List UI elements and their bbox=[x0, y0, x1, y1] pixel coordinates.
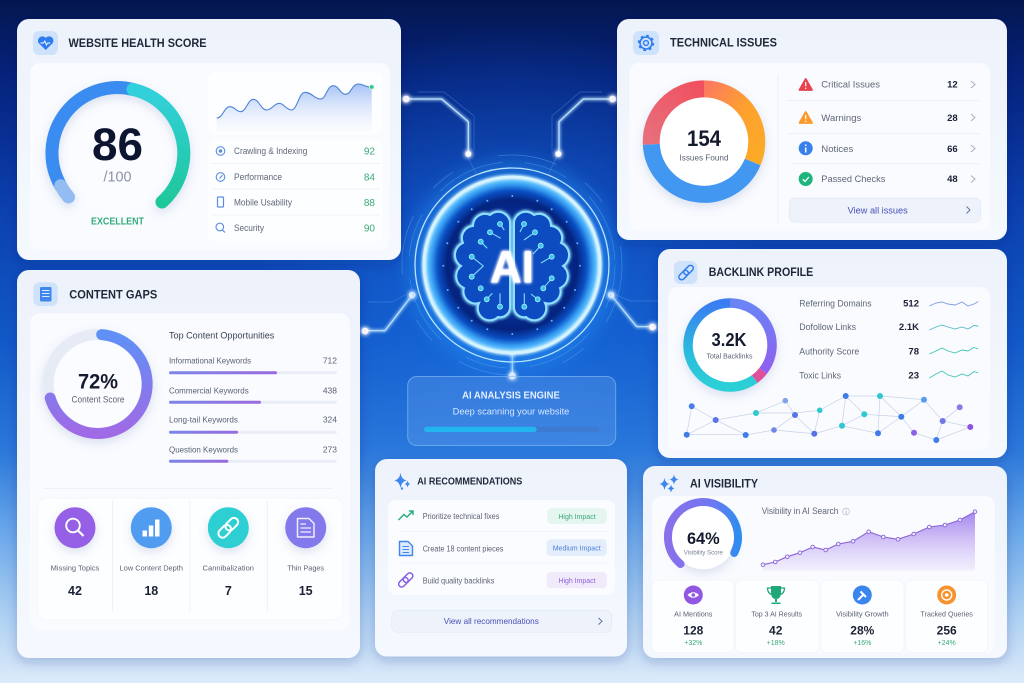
health metrics list: 90 bbox=[364, 224, 375, 234]
view all issues button bbox=[789, 198, 981, 222]
recommendation rows: High Impact bbox=[558, 576, 596, 585]
visibility stat cards: 128 bbox=[683, 624, 704, 638]
recommendation rows bbox=[397, 508, 608, 588]
content opportunities list: 712 bbox=[323, 355, 337, 365]
icon: sparkles bbox=[660, 474, 678, 492]
health metrics list bbox=[208, 140, 382, 241]
visibility stat cards: Visibility Growth bbox=[836, 610, 889, 619]
connector lines bbox=[362, 92, 660, 379]
panel: technical issues bbox=[617, 19, 1007, 240]
panel: AI analysis engine bbox=[408, 376, 616, 446]
content gap stat cards bbox=[38, 488, 343, 620]
content score donut: Content Score bbox=[72, 395, 124, 405]
icon: document bbox=[33, 282, 58, 306]
visibility stat cards: +16% bbox=[853, 640, 871, 647]
issues list: 28 bbox=[947, 113, 958, 124]
health gauge: /100 bbox=[104, 170, 132, 186]
view all recommendations button bbox=[392, 610, 612, 632]
visibility stat cards: 256 bbox=[937, 624, 957, 638]
panel: website health score bbox=[17, 19, 401, 260]
content gap stat cards: 18 bbox=[144, 584, 158, 598]
issues list: 48 bbox=[947, 174, 958, 185]
content score donut bbox=[43, 329, 153, 439]
visibility stat cards: Tracked Queries bbox=[921, 610, 973, 619]
backlink metrics: Toxic Links bbox=[799, 370, 841, 380]
visibility line chart: Visibility in AI Search bbox=[762, 506, 838, 516]
heading: BACKLINK PROFILE bbox=[709, 267, 814, 279]
issues list: Notices bbox=[821, 144, 854, 154]
issues donut bbox=[643, 81, 765, 203]
health metrics list: 92 bbox=[364, 146, 375, 158]
icon: heart bbox=[33, 31, 58, 55]
link network graph bbox=[684, 393, 973, 443]
heading: TECHNICAL ISSUES bbox=[670, 38, 777, 50]
recommendation rows: Prioritize technical fixes bbox=[423, 512, 499, 521]
backlink metrics: 512 bbox=[903, 299, 919, 310]
backlink metrics: 23 bbox=[908, 370, 919, 381]
icon: sparkles bbox=[394, 473, 410, 490]
health metrics list: 88 bbox=[364, 198, 375, 209]
issues list: 12 bbox=[947, 80, 958, 91]
visibility donut bbox=[668, 502, 738, 569]
issues list: Passed Checks bbox=[821, 174, 886, 184]
backlinks donut: 3.2K bbox=[712, 330, 746, 350]
content opportunities list bbox=[169, 330, 337, 463]
recommendation rows: Build quality backlinks bbox=[423, 576, 494, 586]
issues list: Critical Issues bbox=[821, 80, 881, 90]
visibility stat cards: 28% bbox=[850, 624, 875, 638]
content score donut: 72% bbox=[78, 370, 118, 393]
visibility donut: 64% bbox=[687, 529, 720, 548]
health metrics list: 84 bbox=[364, 172, 375, 184]
health gauge bbox=[52, 88, 184, 228]
content gap stat cards: Missing Topics bbox=[51, 564, 100, 573]
content gap stat cards: 7 bbox=[225, 584, 232, 598]
backlink metrics: Dofollow Links bbox=[799, 322, 856, 332]
issues list bbox=[778, 75, 980, 223]
content opportunities list: Informational Keywords bbox=[169, 355, 251, 365]
content opportunities list: 438 bbox=[323, 385, 337, 395]
visibility stat cards: +18% bbox=[767, 640, 785, 647]
visibility donut: Visibility Score bbox=[684, 550, 723, 557]
content opportunities list: Commercial Keywords bbox=[169, 385, 249, 395]
backlinks donut: Total Backlinks bbox=[706, 351, 753, 360]
visibility stat cards: 42 bbox=[769, 624, 783, 638]
backlink metrics: Authority Score bbox=[799, 346, 859, 356]
recommendation rows: Create 18 content pieces bbox=[423, 544, 503, 554]
content gap stat cards: Low Content Depth bbox=[120, 564, 183, 573]
backlink metrics: Referring Domains bbox=[799, 299, 872, 309]
health gauge: 86 bbox=[92, 119, 143, 170]
recommendation rows: Medium Impact bbox=[553, 544, 602, 552]
view all issues button: View all issues bbox=[848, 205, 908, 215]
AI brain orb: AI bbox=[490, 241, 534, 292]
panel: backlink profile bbox=[658, 249, 1007, 458]
content opportunities list: Question Keywords bbox=[169, 444, 238, 454]
icon: link bbox=[674, 261, 697, 284]
backlink metrics bbox=[799, 299, 978, 381]
heading: AI VISIBILITY bbox=[690, 478, 758, 490]
trend sparkline bbox=[208, 72, 382, 134]
panel: AI visibility bbox=[643, 466, 1007, 658]
visibility stat cards: Top 3 AI Results bbox=[751, 610, 802, 619]
content gap stat cards: 42 bbox=[68, 584, 82, 598]
backlink metrics: 78 bbox=[908, 346, 919, 357]
health metrics list: Crawling & Indexing bbox=[234, 146, 307, 156]
panel: AI analysis engine: AI ANALYSIS ENGINE bbox=[462, 390, 560, 401]
content gap stat cards: Thin Pages bbox=[287, 564, 324, 573]
health gauge: EXCELLENT bbox=[91, 216, 144, 228]
visibility stat cards: +24% bbox=[938, 640, 956, 647]
view all recommendations button: View all recommendations bbox=[444, 616, 539, 626]
content gap stat cards: 15 bbox=[299, 584, 313, 598]
content opportunities list: Long-tail Keywords bbox=[169, 415, 238, 425]
health metrics list: Performance bbox=[234, 172, 282, 182]
panel: AI recommendations bbox=[375, 459, 627, 656]
central background glow bbox=[200, 20, 824, 540]
heading: CONTENT GAPS bbox=[69, 289, 158, 301]
content gap stat cards: Cannibalization bbox=[203, 564, 254, 573]
visibility stat cards: AI Mentions bbox=[674, 610, 713, 619]
visibility line chart bbox=[761, 506, 977, 570]
issues donut: 154 bbox=[687, 126, 722, 151]
heading: WEBSITE HEALTH SCORE bbox=[68, 38, 207, 50]
visibility stat cards bbox=[652, 580, 988, 653]
issues list: 66 bbox=[947, 144, 958, 155]
backlinks donut bbox=[684, 298, 776, 392]
issues donut: Issues Found bbox=[680, 153, 729, 163]
content opportunities list: 324 bbox=[323, 415, 337, 425]
panel: AI analysis engine: Deep scanning your website bbox=[453, 406, 569, 417]
icon: gear bbox=[633, 31, 659, 55]
AI brain orb bbox=[402, 155, 622, 375]
health metrics list: Mobile Usability bbox=[234, 198, 292, 208]
backlink metrics: 2.1K bbox=[899, 322, 919, 333]
visibility stat cards: +32% bbox=[684, 640, 702, 647]
content opportunities list: 273 bbox=[323, 444, 337, 454]
recommendation rows: High Impact bbox=[558, 512, 596, 521]
health metrics list: Security bbox=[234, 223, 264, 233]
content opportunities list: Top Content Opportunities bbox=[169, 330, 275, 340]
heading: AI RECOMMENDATIONS bbox=[417, 476, 523, 487]
panel: content gaps bbox=[17, 270, 360, 658]
issues list: Warnings bbox=[821, 113, 862, 123]
